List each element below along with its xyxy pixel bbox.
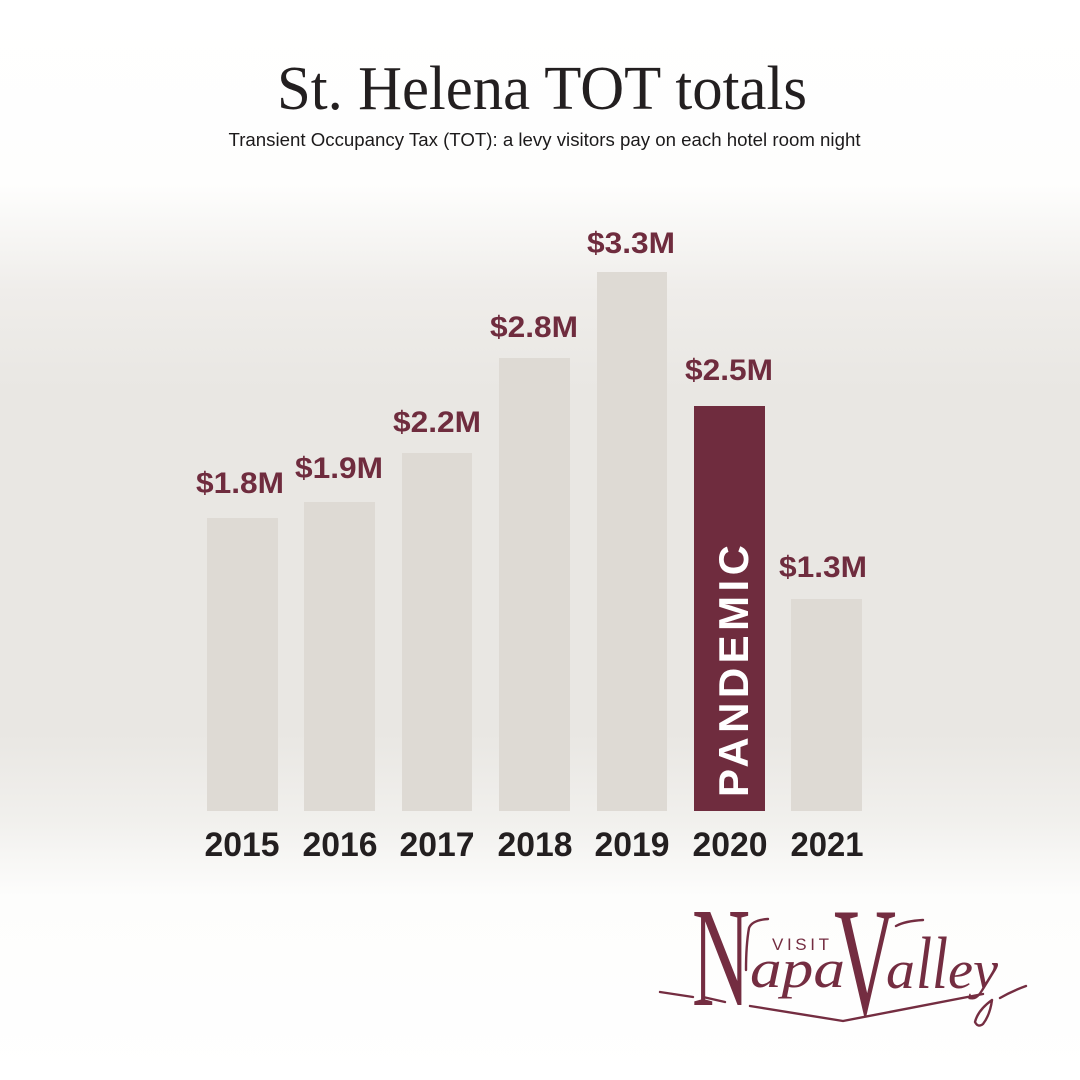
- logo: Visit Napa Valley: V: [834, 876, 896, 1048]
- bar: 2020 pandemic: [685, 354, 773, 864]
- bar: 2020 pandemic: 2020: [692, 826, 768, 864]
- bar: 2021: $1.3M: [779, 551, 867, 584]
- bar: 2018: 2018: [498, 826, 572, 864]
- bar: 2016: $1.9M: [295, 452, 383, 485]
- bar chart: [196, 227, 867, 864]
- bar: 2019: $3.3M: [587, 227, 675, 260]
- bar: 2017: $2.2M: [393, 406, 481, 439]
- logo: Visit Napa Valley: ey: [948, 940, 998, 1000]
- logo: Visit Napa Valley: ll: [916, 923, 948, 1005]
- bar: 2017: [393, 406, 481, 864]
- logo: Visit Napa Valley: apa: [750, 939, 845, 999]
- bar: 2018: [490, 311, 578, 864]
- bar: 2020 pandemic: $2.5M: [685, 354, 773, 387]
- logo: Visit Napa Valley: [660, 876, 1026, 1048]
- bar: 2017: 2017: [400, 826, 474, 864]
- bar: 2019: 2019: [594, 826, 670, 864]
- logo: Visit Napa Valley: N: [692, 878, 750, 1036]
- logo: Visit Napa Valley: VISIT: [772, 935, 831, 954]
- bar: 2020 pandemic: PANDEMIC: [710, 545, 757, 797]
- bar: 2019: [587, 227, 675, 864]
- subtitle: Transient Occupancy Tax (TOT): a levy visitors pay on each hotel room night: [228, 130, 861, 150]
- bar: 2018: $2.8M: [490, 311, 578, 344]
- title: St. Helena TOT totals: [277, 55, 807, 123]
- bar: 2021: 2021: [790, 826, 864, 864]
- bar: 2016: [295, 452, 383, 864]
- bar: 2015: [196, 467, 284, 864]
- bar: 2015: $1.8M: [196, 467, 284, 500]
- bar: 2016: 2016: [302, 826, 378, 864]
- bar: 2015: 2015: [204, 826, 280, 864]
- bar: 2021: [779, 551, 867, 864]
- logo: Visit Napa Valley: a: [886, 940, 915, 1000]
